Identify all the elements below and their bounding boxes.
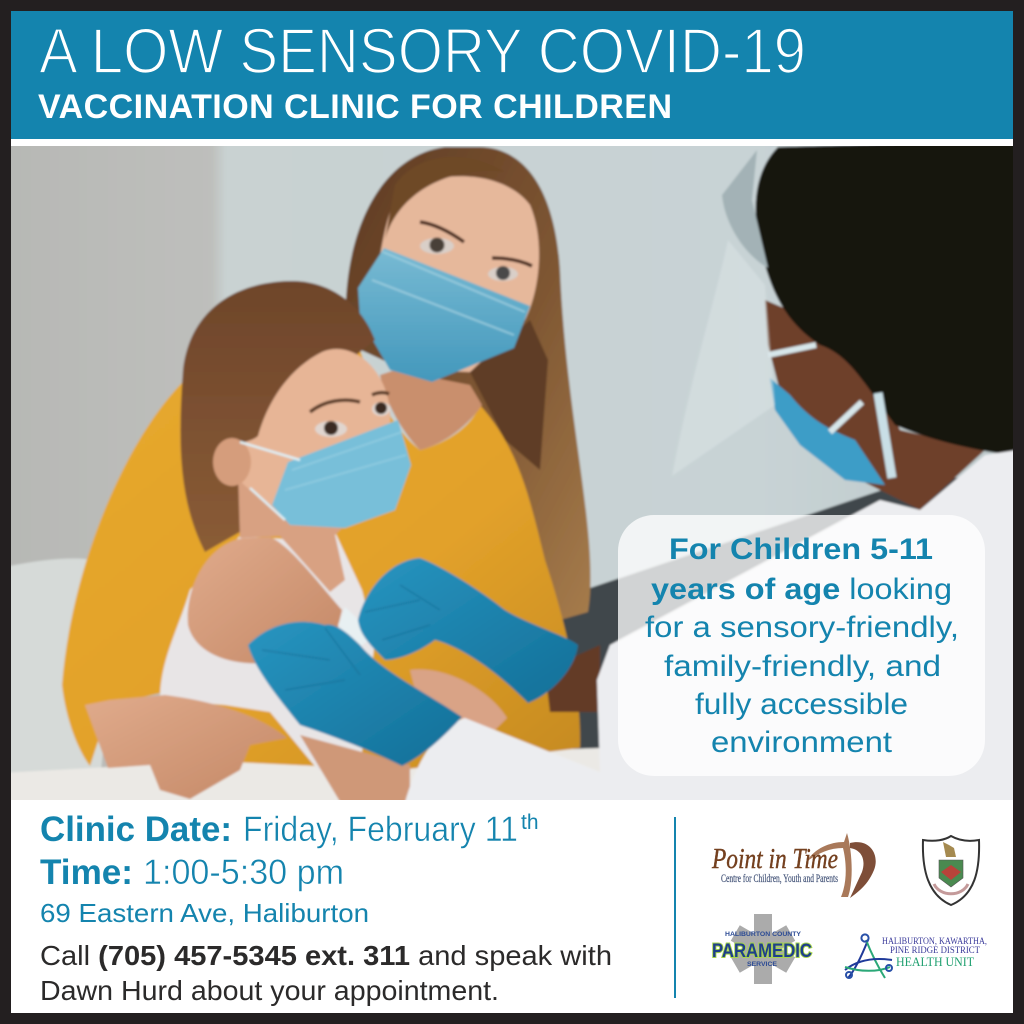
girl's eyes — [315, 402, 390, 437]
woman's eyes — [420, 238, 518, 281]
logo: health unit: HEALTH UNIT — [896, 954, 974, 969]
doctor's glove on arm — [248, 622, 462, 766]
girl's brows — [310, 393, 389, 412]
appointment contact: Dawn Hurd about your appointment. — [40, 975, 499, 1006]
logo: health unit: PINE RIDGE DISTRICT — [890, 945, 980, 955]
address: 69 Eastern Ave, Haliburton — [40, 898, 369, 928]
callout text: years of age looking — [651, 573, 952, 606]
callout text: fully accessible — [695, 688, 908, 721]
table — [11, 746, 602, 800]
title: A LOW SENSORY COVID-19 — [39, 15, 806, 87]
woman's mask — [358, 248, 530, 382]
logo: paramedic service: SERVICE — [747, 962, 777, 968]
clinic time: 1:00-5:30 pm — [143, 853, 344, 892]
subtitle: VACCINATION CLINIC FOR CHILDREN — [38, 88, 672, 126]
callout: who the clinic is for — [618, 515, 985, 776]
woman's sweater — [62, 350, 580, 770]
wall background — [11, 146, 998, 769]
callout text: For Children 5-11 — [669, 533, 933, 566]
girl's lower arm — [300, 734, 412, 800]
doctor's white coat — [403, 448, 1024, 810]
logo: paramedic service: PARAMEDIC — [712, 940, 812, 962]
woman's brows — [420, 222, 532, 266]
logo: health unit — [845, 934, 987, 978]
clinic date — [40, 810, 539, 849]
face shield — [672, 150, 775, 476]
doctor's glove on pad — [358, 558, 578, 703]
doctor's mask — [768, 345, 892, 485]
girl's ear — [213, 438, 251, 486]
girl's neck — [236, 482, 346, 592]
girl's tank top — [160, 532, 375, 770]
sofa at left — [11, 558, 104, 773]
clinic date: Clinic Date: — [40, 810, 232, 849]
clinic date: th — [521, 811, 539, 834]
woman's neck — [380, 370, 482, 450]
header banner — [11, 11, 1013, 146]
girl's face — [242, 347, 392, 504]
girl's arm and shoulder — [188, 537, 342, 663]
woman's arm — [85, 695, 287, 799]
logo: Point in Time: Point in Time — [711, 843, 838, 875]
girl's mask — [240, 420, 411, 528]
woman's hair fringe — [384, 175, 450, 237]
logo: paramedic service — [712, 914, 812, 984]
logo: county crest — [923, 836, 979, 905]
clinic date: Friday, February 11 — [243, 810, 518, 849]
callout text: environment — [711, 726, 893, 759]
callout text: for a sensory-friendly, — [645, 611, 959, 644]
doctor's hair — [756, 140, 1024, 458]
woman's face — [375, 176, 539, 372]
logo: health unit: HALIBURTON, KAWARTHA, — [882, 936, 987, 946]
doctor's face and neck — [765, 300, 985, 510]
callout text — [645, 533, 959, 759]
doctor's wrist — [545, 645, 600, 712]
logo: paramedic service: HALIBURTON COUNTY — [725, 931, 802, 938]
photo: child receiving vaccination — [0, 130, 1024, 820]
girl's hand on table — [410, 669, 507, 730]
logo: Point in Time — [711, 833, 876, 898]
divider — [674, 817, 676, 998]
woman's hair shadow — [470, 320, 548, 470]
clinic time — [40, 853, 344, 892]
cotton pad — [337, 609, 366, 645]
details panel — [11, 800, 1013, 1013]
woman's hair — [346, 147, 591, 622]
logo: Point in Time: Centre for Children, Youth and Parents — [721, 873, 838, 885]
girl's hair — [180, 281, 375, 552]
clinic time: Time: — [40, 853, 133, 892]
callout text: family-friendly, and — [664, 650, 941, 683]
dark floor band — [560, 476, 958, 750]
phone call to action: Call (705) 457-5345 ext. 311 and speak with — [40, 940, 612, 971]
